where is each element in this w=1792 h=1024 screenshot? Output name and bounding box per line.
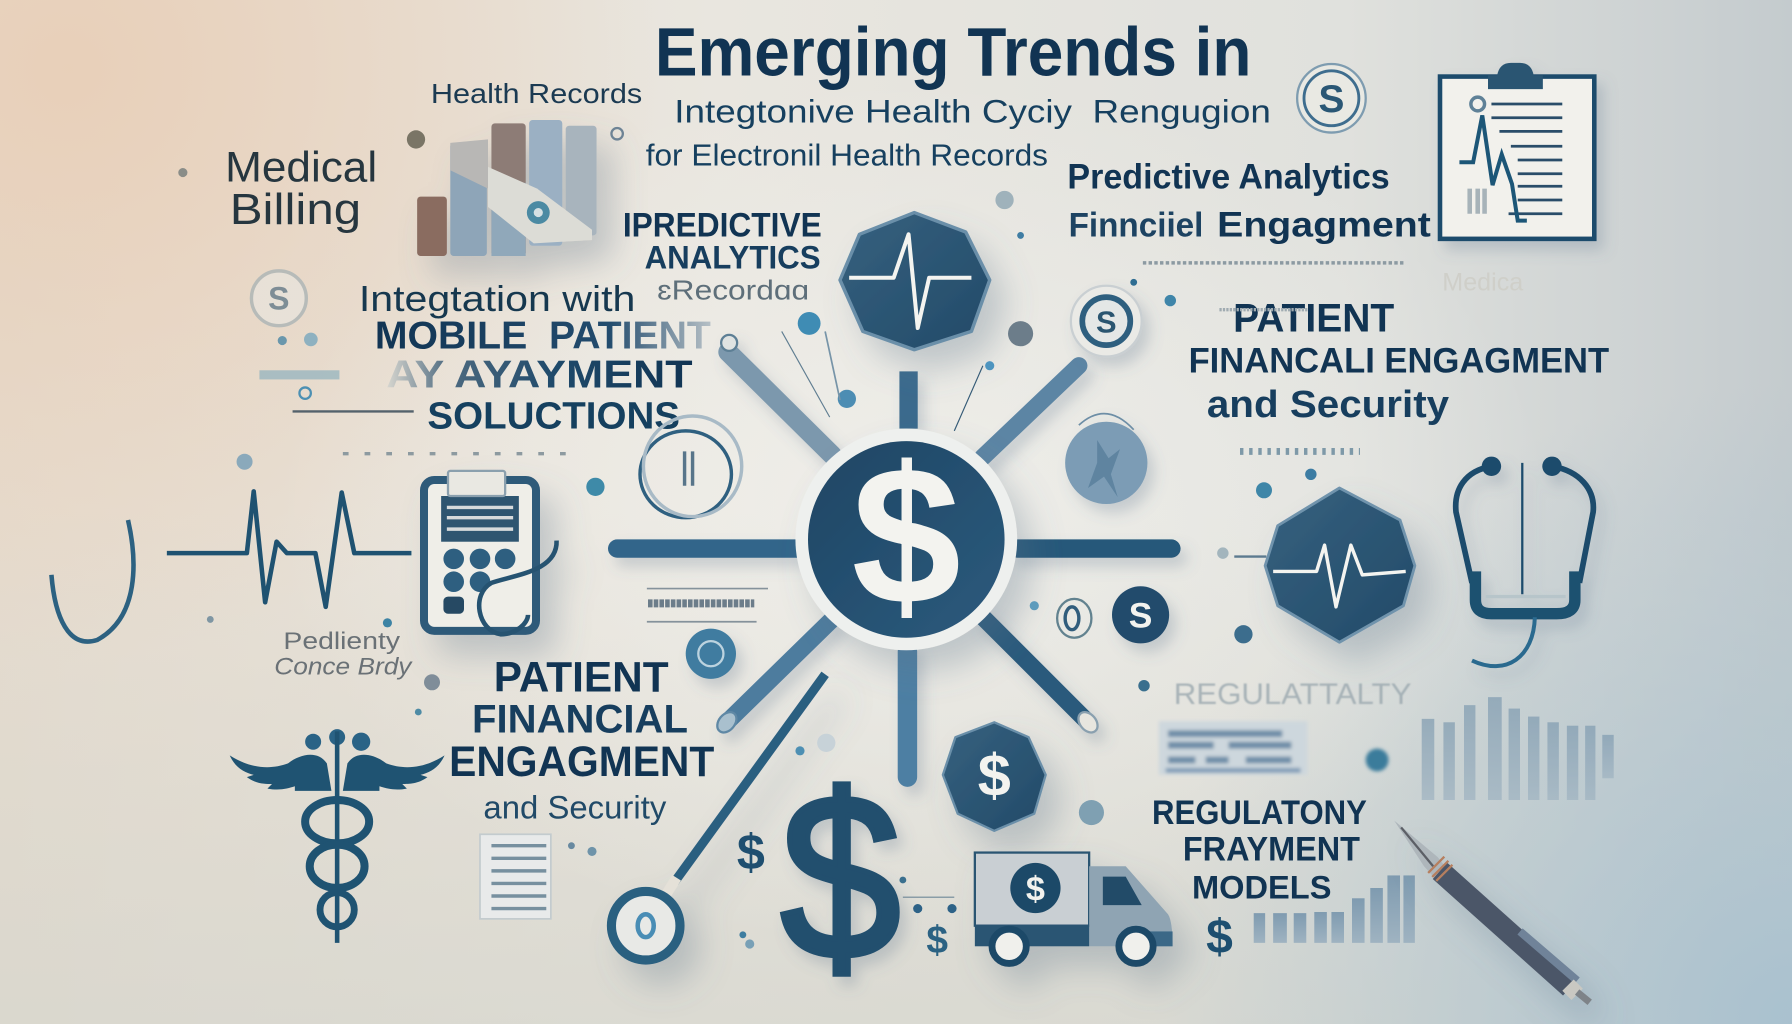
text: financial engagement top: Finnciiel xyxy=(1069,207,1203,245)
coin icon: S dark xyxy=(1112,586,1169,643)
text: financial engagement top: Engagment xyxy=(1217,205,1431,245)
text: predictive analytics right: Predictive Analytics xyxy=(1067,157,1390,197)
text: pediatric concierge: Conce Brdy xyxy=(274,653,414,680)
truck icon: $ xyxy=(1026,871,1045,909)
text: integration with mobile patient payment solutions: Integtation with xyxy=(359,278,635,319)
dollar badge xyxy=(943,722,1046,831)
pen icon xyxy=(1394,821,1590,1002)
coin icon: S upper right of hub: S xyxy=(1096,305,1117,340)
coin icon: left xyxy=(251,271,306,326)
subtitle line 2: for Electronil Health Records xyxy=(646,138,1048,173)
ring icon beside S coin xyxy=(1057,599,1091,638)
truck icon xyxy=(975,853,1173,963)
caduceus icon xyxy=(230,729,445,943)
heading: medical billing xyxy=(225,144,377,234)
text: predictive analytics left: ANALYTICS xyxy=(645,240,821,276)
heartbeat badge: top xyxy=(840,213,990,350)
coin icon: S dark: S xyxy=(1129,595,1152,635)
text: patient financial engagement lower: FINANCIAL xyxy=(472,698,688,742)
text: regulatory payment models: MODELS xyxy=(1192,869,1331,905)
dollar sign: small: $ xyxy=(737,824,765,881)
dollar badge: $ xyxy=(978,741,1011,808)
text: predictive analytics left: IPREDICTIVE xyxy=(623,207,822,245)
calculator icon xyxy=(424,471,557,634)
text: pediatric concierge xyxy=(274,628,414,680)
heading: medical billing: Medical xyxy=(225,144,377,191)
text: integration with mobile patient payment solutions: SOLUCTIONS xyxy=(427,395,680,437)
text: predictive analytics left xyxy=(623,207,822,305)
spokes xyxy=(617,335,1171,777)
icon: bar chart with bill xyxy=(417,120,597,256)
dollar sign: near truck: $ xyxy=(926,919,948,962)
small teal target icon xyxy=(686,629,736,679)
title: Emerging Trends in xyxy=(655,13,1251,90)
heartbeat line xyxy=(167,491,411,607)
lower bar chart xyxy=(1254,875,1415,943)
coin icon: top right xyxy=(1297,64,1366,133)
central dollar hub: $ xyxy=(852,425,961,645)
document icon xyxy=(480,834,551,919)
text: patient financial engagement lower: ENGAGMENT xyxy=(449,738,714,785)
text: patient financial engagement lower xyxy=(449,653,714,825)
faded heading: regulatory: REGULATTALTY xyxy=(1174,678,1412,711)
text: integration with mobile patient payment solutions: MOBILE PATIENT xyxy=(375,315,711,358)
text: regulatory payment models xyxy=(1152,794,1367,905)
clipboard icon xyxy=(1440,63,1594,239)
text: patient financial engagement right: PATIENT xyxy=(1233,296,1394,340)
text: regulatory payment models: REGULATONY xyxy=(1152,794,1367,832)
text: patient financial engagement right: FINANCALI ENGAGMENT xyxy=(1189,341,1609,381)
gear disc icon xyxy=(1065,414,1147,504)
heartbeat shield xyxy=(1265,488,1415,642)
coin icon: top right: S xyxy=(1318,78,1344,121)
subtitle line 1: Integtonive Health Cyciy Rengugion xyxy=(674,93,1271,129)
text: pediatric concierge: Pedlienty xyxy=(283,628,400,655)
stethoscope icon xyxy=(1456,457,1593,666)
dollar sign: near chart: $ xyxy=(1206,911,1233,964)
text: regulatory payment models: FRAYMENT xyxy=(1183,831,1360,869)
central dollar hub xyxy=(795,425,1017,650)
dollar sign: large: $ xyxy=(781,746,901,1008)
heading: health records: Health Records xyxy=(431,78,642,109)
text: patient financial engagement lower: and Security xyxy=(483,789,666,825)
coin icon: S upper right of hub xyxy=(1071,286,1142,357)
text: predictive analytics left: ɛRecordɑɑ xyxy=(657,274,809,305)
stethoscope chest piece xyxy=(611,674,825,960)
coin icon: left: S xyxy=(268,281,290,317)
scattered small dots and marks xyxy=(178,128,1406,949)
faded word: medical: Medica xyxy=(1442,268,1523,296)
text: patient financial engagement right xyxy=(1189,296,1609,425)
text: patient financial engagement lower: PATIENT xyxy=(494,653,669,700)
text: integration with mobile patient payment solutions: AY AYAYMENT xyxy=(386,353,693,396)
text: integration with mobile patient payment solutions xyxy=(359,278,711,437)
heading: medical billing: Billing xyxy=(230,186,361,234)
text: financial engagement top xyxy=(1069,205,1431,245)
text: patient financial engagement right: and Security xyxy=(1207,383,1449,425)
blurred building image xyxy=(1159,721,1389,775)
hook tube xyxy=(51,520,133,642)
faded bar chart xyxy=(1422,697,1614,800)
ring icon left of hub xyxy=(640,416,742,518)
